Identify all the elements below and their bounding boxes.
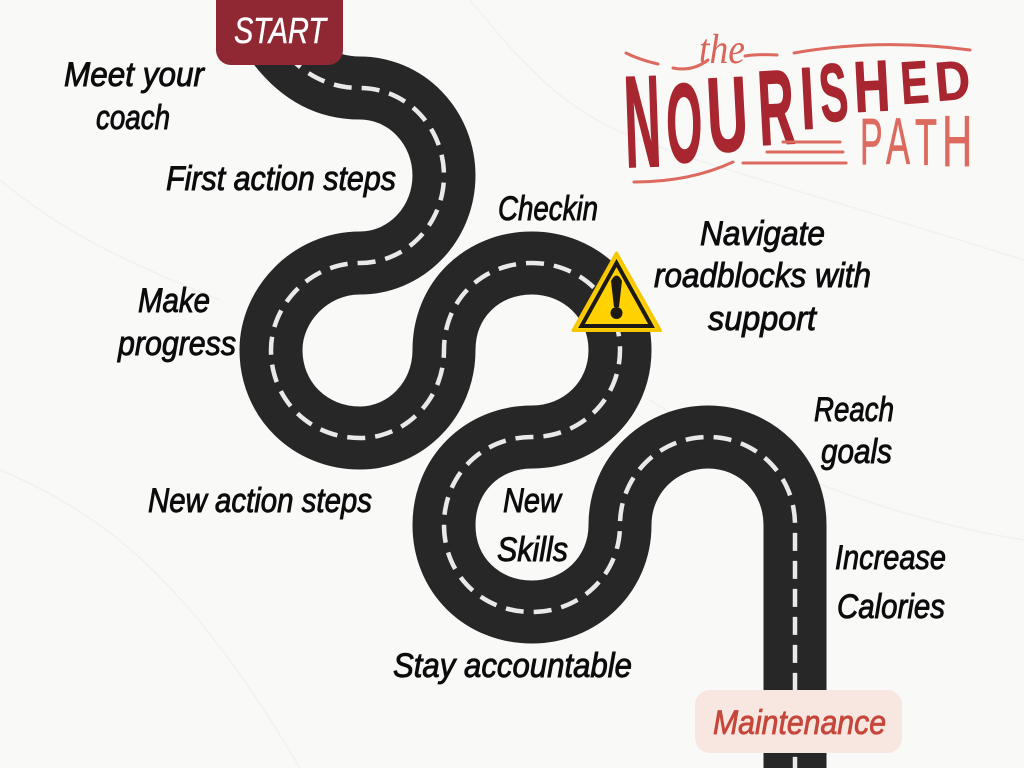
label: navigate roadblocks [654,215,871,338]
logo: the nourished path [622,27,973,195]
label: reach goals: goals [821,433,892,471]
maintenance badge [695,690,902,753]
logo word: path: H [942,102,972,182]
label: new skills: Skills [497,531,568,569]
label: make progress: progress [117,325,236,363]
logo word: nourished: D [933,48,973,113]
logo word: nourished: E [898,48,931,117]
icon: warning sign [573,253,660,330]
logo word: path [860,102,972,182]
label: increase calories: Calories [837,588,945,626]
label: make progress: Make [138,282,210,320]
winding road [270,33,795,768]
label: navigate roadblocks: support [708,300,817,338]
logo word: path: T [915,107,937,180]
logo word: path: A [886,106,910,179]
start badge [216,0,343,65]
label: first action steps: First action steps [166,160,396,198]
label: meet your coach: Meet your [64,56,206,94]
start badge: START [234,10,328,51]
label: check in: Checkin [498,190,598,228]
label: new skills [497,482,568,569]
label: meet your coach: coach [96,99,170,137]
logo word: nourished: S [816,46,851,140]
label: increase calories [835,539,946,626]
label: navigate roadblocks: Navigate [700,215,825,253]
label: stay accountable: Stay accountable [393,647,632,685]
logo word: nourished: I [798,50,817,149]
logo word: nourished: N [622,48,663,195]
label: new skills: New [503,482,563,520]
logo word: nourished: R [755,47,797,168]
label: navigate roadblocks: roadblocks with [654,257,871,295]
label: increase calories: Increase [835,539,946,577]
maintenance badge: Maintenance [713,704,886,742]
label: new action steps: New action steps [148,482,372,520]
logo word: nourished [622,46,973,195]
logo word: nourished: U [704,54,751,174]
logo word: nourished: H [852,46,892,128]
logo word: the: the [699,27,745,73]
logo word: nourished: O [665,61,703,187]
label: make progress [117,282,236,363]
label: reach goals: Reach [814,391,894,429]
logo flourishes [626,45,970,182]
logo word: path: P [860,105,883,179]
label: reach goals [814,391,894,471]
label: meet your coach [64,56,206,137]
